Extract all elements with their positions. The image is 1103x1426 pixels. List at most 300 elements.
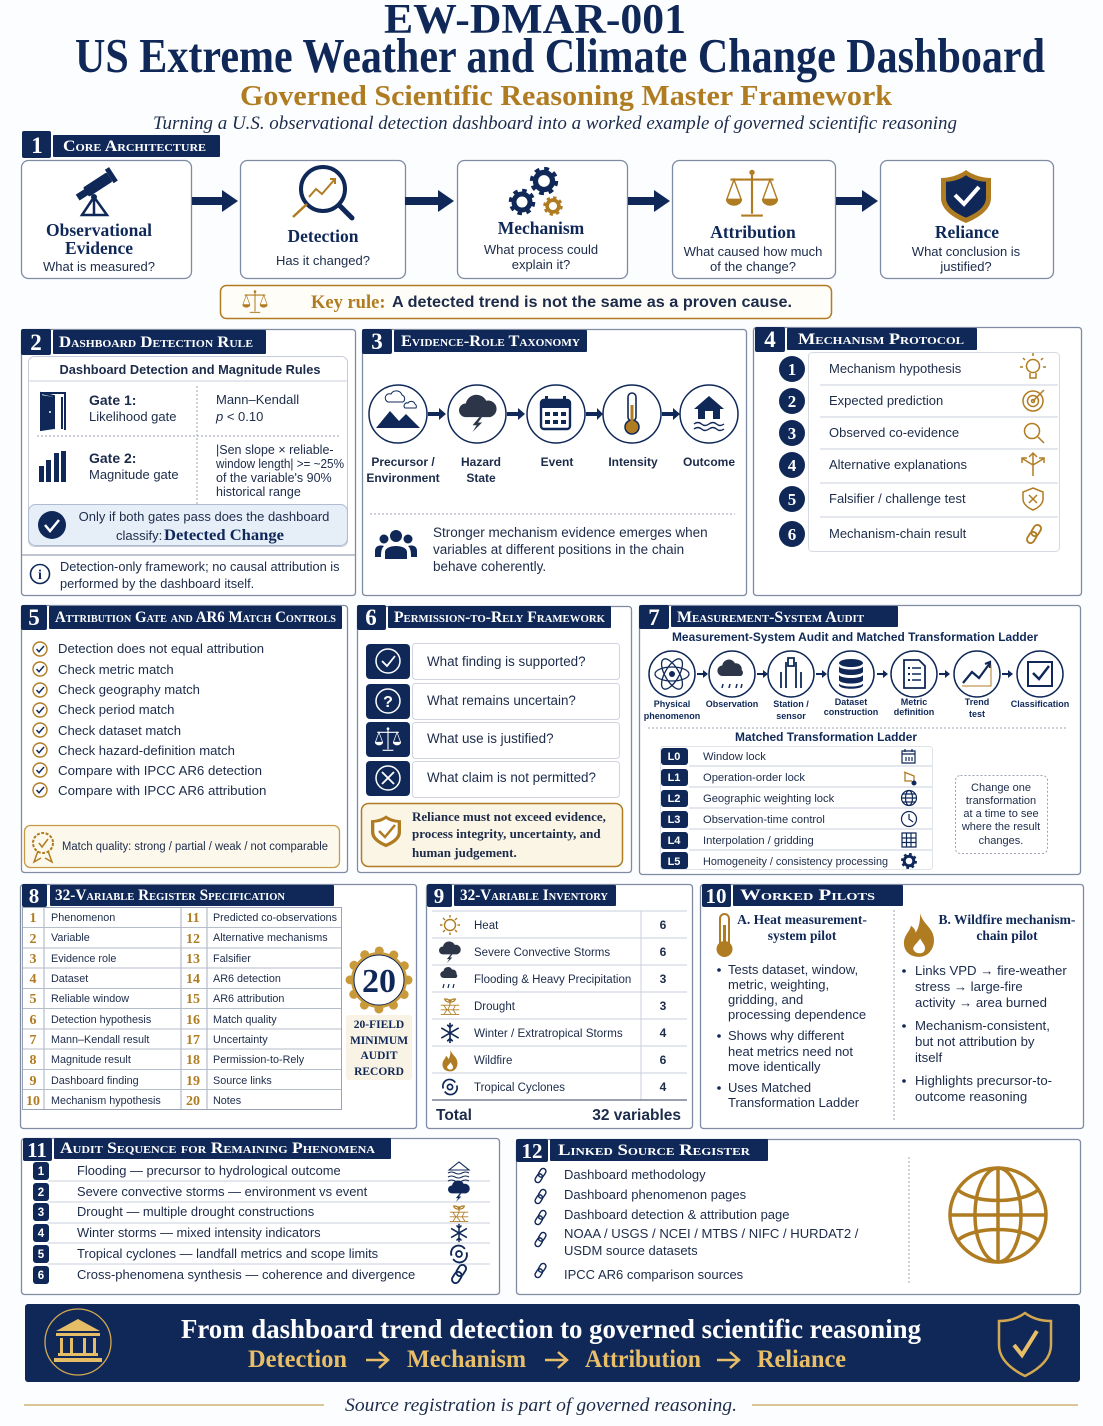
panel 7: measurement-system audit: Matched Transformation Ladder bbox=[735, 730, 917, 744]
section header 7: 7 bbox=[648, 605, 660, 630]
chain: metric definition bbox=[891, 651, 937, 717]
chain: trend test: test bbox=[969, 709, 985, 719]
chain: outcome bbox=[680, 385, 738, 469]
card: observational evidence bbox=[22, 160, 192, 278]
L3: L3 bbox=[668, 814, 680, 826]
register table: Variable bbox=[51, 932, 90, 944]
pilot B: outcome reasoning bbox=[915, 1089, 1027, 1104]
checklist: Check geography match bbox=[58, 682, 200, 697]
step 6 bbox=[779, 521, 1042, 547]
L3 bbox=[661, 811, 916, 828]
winter: Winter / Extratropical Storms bbox=[474, 1027, 623, 1040]
arrow bbox=[836, 190, 878, 212]
card: reliance: justified? bbox=[939, 259, 992, 274]
chain: physical phenomenon: Physical bbox=[654, 699, 690, 709]
section header 4: Mechanism Protocol bbox=[798, 331, 964, 348]
source list: Dashboard detection & attribution page bbox=[564, 1207, 790, 1222]
section header 6 bbox=[357, 605, 611, 630]
section header 9: 32-Variable Inventory bbox=[460, 887, 608, 904]
source list: USDM source datasets bbox=[564, 1243, 698, 1258]
card: attribution: Attribution bbox=[710, 222, 796, 242]
register table: 11 bbox=[186, 911, 200, 926]
callout: both gates bbox=[28, 504, 348, 546]
panel 5: attribution gate bbox=[21, 605, 348, 872]
chain: classification bbox=[1011, 651, 1069, 709]
heat: 6 bbox=[660, 918, 667, 932]
step 6: 6 bbox=[788, 525, 796, 544]
checklist: Check period match bbox=[58, 702, 174, 717]
L3: Observation-time control bbox=[703, 814, 825, 826]
step 1: Flooding — precursor to hydrological outcome bbox=[77, 1163, 341, 1178]
section header 2 bbox=[21, 329, 266, 355]
panel 3: evidence-role taxonomy bbox=[362, 329, 746, 596]
pilot B: but not attribution by bbox=[915, 1034, 1035, 1049]
step 4 bbox=[33, 1224, 467, 1242]
L5: L5 bbox=[668, 856, 680, 868]
register table: Falsifier bbox=[213, 953, 251, 965]
callout: reliance must not exceed: human judgement. bbox=[412, 845, 517, 860]
callout: change one transformation: where the result bbox=[961, 821, 1040, 833]
chain: observation bbox=[706, 651, 758, 709]
section header 1: Core Architecture bbox=[63, 138, 206, 155]
chain: outcome: Outcome bbox=[683, 455, 735, 469]
arrow bbox=[428, 408, 446, 420]
section header 4 bbox=[755, 327, 977, 352]
note: coherence: variables at different positions in the chain bbox=[433, 542, 684, 557]
question: use justified bbox=[366, 722, 620, 758]
wildfire: Wildfire bbox=[474, 1055, 512, 1067]
panel 8: register specification bbox=[20, 884, 416, 1128]
step 3 bbox=[33, 1203, 468, 1221]
chain: hazard state: State bbox=[466, 471, 496, 485]
step 3: 3 bbox=[38, 1207, 44, 1219]
winter bbox=[441, 1023, 667, 1043]
callout: reliance must not exceed bbox=[362, 804, 622, 866]
register table: 20 bbox=[186, 1094, 200, 1109]
total: Total bbox=[436, 1107, 472, 1124]
chain: dataset construction: Dataset bbox=[835, 697, 867, 707]
register table: 10 bbox=[26, 1094, 40, 1109]
gate 2: window length| >= ~25% bbox=[215, 457, 344, 471]
tropical cyclones: 4 bbox=[660, 1080, 667, 1094]
card: reliance: Reliance bbox=[935, 222, 999, 242]
callout: both gates: Only if both gates pass does the dashboard bbox=[79, 509, 329, 524]
register table: 7 bbox=[30, 1033, 36, 1048]
L4 bbox=[661, 832, 916, 849]
severe convective: Severe Convective Storms bbox=[474, 947, 610, 959]
card: mechanism: explain it? bbox=[512, 257, 570, 272]
step 3: Drought — multiple drought constructions bbox=[77, 1204, 314, 1219]
step 2: 2 bbox=[788, 392, 796, 411]
pilot A: system pilot bbox=[768, 928, 837, 943]
checklist: Check hazard-definition match bbox=[58, 743, 235, 758]
gate 1: p < 0.10 bbox=[215, 409, 263, 424]
checklist: Detection does not equal attribution bbox=[58, 641, 264, 656]
step 5: Falsifier / challenge test bbox=[829, 491, 966, 506]
inventory rows bbox=[432, 911, 687, 1100]
panel 2: dashboard detection rule bbox=[21, 329, 356, 596]
register table: Dashboard finding bbox=[51, 1075, 139, 1087]
section header 5 bbox=[21, 605, 342, 630]
chain: precursor bbox=[366, 385, 440, 485]
pilot A: processing dependence bbox=[728, 1007, 866, 1022]
pilot A: Uses Matched bbox=[728, 1080, 811, 1095]
step 1: 1 bbox=[788, 360, 796, 379]
badge caption: MINIMUM bbox=[350, 1035, 408, 1047]
register table: 13 bbox=[186, 952, 200, 967]
pilot B: stress → large-fire bbox=[915, 979, 1023, 994]
register table: Notes bbox=[213, 1095, 242, 1107]
arrow bbox=[662, 408, 680, 420]
pilot A: A. Heat measurement- bbox=[737, 912, 867, 927]
question: supported: What finding is supported? bbox=[427, 654, 586, 669]
card: mechanism bbox=[458, 160, 628, 278]
gate 1 bbox=[41, 392, 299, 430]
section header 3 bbox=[362, 329, 587, 354]
chain: intensity: Intensity bbox=[608, 455, 658, 469]
chain: physical phenomenon: phenomenon bbox=[644, 711, 700, 721]
callout: change one transformation bbox=[956, 776, 1048, 854]
card: detection bbox=[240, 160, 406, 278]
icon: gears bbox=[510, 169, 561, 214]
sequence: Mechanism bbox=[407, 1346, 526, 1373]
arrow bbox=[507, 408, 525, 420]
register table: 8 bbox=[30, 1053, 36, 1068]
note: detection only: i bbox=[38, 568, 42, 583]
severe convective bbox=[439, 941, 667, 963]
register table: AR6 attribution bbox=[213, 993, 284, 1005]
gate 1: Likelihood gate bbox=[89, 409, 176, 424]
source list: NOAA / USGS / NCEI / MTBS / NIFC / HURDAT2 / bbox=[564, 1226, 859, 1241]
pilot B: chain pilot bbox=[976, 928, 1038, 943]
rules table bbox=[28, 356, 348, 546]
severe convective: 6 bbox=[660, 945, 667, 959]
question: uncertain: What remains uncertain? bbox=[427, 693, 576, 708]
gate 1: Mann–Kendall bbox=[216, 392, 299, 407]
section header 12: 12 bbox=[522, 1139, 542, 1163]
question: not permitted: What claim is not permitted? bbox=[427, 770, 596, 785]
step 5 bbox=[33, 1245, 467, 1263]
tropical cyclones bbox=[443, 1079, 667, 1095]
icon: thermometer bbox=[716, 914, 732, 957]
register table: 18 bbox=[186, 1053, 200, 1068]
callout: key rule: A detected trend is not the same as a proven cause. bbox=[392, 294, 792, 311]
heat: Heat bbox=[474, 920, 499, 932]
note: detection only: Detection-only framework; no causal attribution is bbox=[60, 559, 340, 574]
step 2: Expected prediction bbox=[829, 393, 943, 408]
section header 12: Linked Source Register bbox=[558, 1142, 751, 1159]
register table: 19 bbox=[186, 1074, 200, 1089]
source list: Dashboard phenomenon pages bbox=[564, 1187, 747, 1202]
step 2: Severe convective storms — environment vs event bbox=[77, 1184, 368, 1199]
chain: trend test bbox=[954, 651, 1000, 719]
register table: 2 bbox=[30, 932, 36, 947]
question: use justified: What use is justified? bbox=[427, 731, 554, 746]
chain: dataset construction bbox=[824, 651, 878, 717]
register table: 5 bbox=[30, 992, 36, 1007]
pilot A: Transformation Ladder bbox=[728, 1095, 860, 1110]
card: reliance: What conclusion is bbox=[912, 244, 1021, 259]
register table: Phenomenon bbox=[51, 912, 115, 924]
wildfire: 6 bbox=[660, 1053, 667, 1067]
chain: precursor: Environment bbox=[366, 471, 440, 485]
step 5: Tropical cyclones — landfall metrics and scope limits bbox=[77, 1246, 378, 1261]
pilot A bbox=[716, 912, 867, 1110]
tagline: Turning a U.S. observational detection dashboard into a worked example of governed scientific reasoning bbox=[153, 114, 957, 134]
section header 5: 5 bbox=[28, 605, 40, 630]
tropical cyclones: Tropical Cyclones bbox=[474, 1082, 565, 1094]
card: attribution: of the change? bbox=[710, 259, 796, 274]
section header 9 bbox=[427, 884, 616, 908]
source list bbox=[534, 1167, 859, 1282]
section header 11: Audit Sequence for Remaining Phenomena bbox=[60, 1140, 375, 1157]
register table: 9 bbox=[30, 1074, 36, 1089]
chain: intensity bbox=[603, 385, 661, 469]
step 6: Cross-phenomena synthesis — coherence and divergence bbox=[77, 1267, 415, 1282]
gate 2 bbox=[39, 443, 344, 499]
pilot B: B. Wildfire mechanism- bbox=[939, 912, 1075, 927]
question: not permitted bbox=[366, 761, 620, 798]
L5 bbox=[661, 852, 916, 869]
register table: Permission-to-Rely bbox=[213, 1054, 305, 1066]
L4: L4 bbox=[668, 835, 681, 847]
section header 3: 3 bbox=[371, 329, 383, 354]
L0: Window lock bbox=[703, 751, 766, 763]
note: detection only bbox=[30, 559, 340, 591]
section header 2: 2 bbox=[30, 330, 42, 355]
L1 bbox=[661, 769, 916, 786]
icon: telescope bbox=[74, 168, 117, 215]
pilot A: Shows why different bbox=[728, 1028, 844, 1043]
step 2: 2 bbox=[38, 1187, 44, 1199]
card: observational evidence: Observational bbox=[46, 220, 152, 240]
register table: Mechanism hypothesis bbox=[51, 1095, 161, 1107]
step 4: Alternative explanations bbox=[829, 457, 968, 472]
arrow bbox=[628, 190, 670, 212]
sequence: Detection bbox=[248, 1346, 347, 1373]
step 1 bbox=[33, 1162, 469, 1182]
L2: Geographic weighting lock bbox=[703, 793, 835, 805]
section header 8: 32-Variable Register Specification bbox=[55, 887, 285, 904]
icon: flame bbox=[904, 913, 934, 957]
L1: Operation-order lock bbox=[703, 772, 805, 784]
chain: precursor: Precursor / bbox=[371, 455, 435, 469]
register table: 3 bbox=[30, 952, 36, 967]
L2: L2 bbox=[668, 793, 680, 805]
question: supported bbox=[366, 644, 620, 680]
step 1: Mechanism hypothesis bbox=[829, 361, 962, 376]
question: uncertain: ? bbox=[383, 694, 393, 711]
step 3: Observed co-evidence bbox=[829, 425, 959, 440]
section header 12 bbox=[516, 1139, 768, 1163]
card: detection: Has it changed? bbox=[276, 253, 370, 268]
winter: 4 bbox=[660, 1026, 667, 1040]
total: 32 variables bbox=[592, 1107, 681, 1124]
wildfire bbox=[442, 1050, 667, 1071]
source list: IPCC AR6 comparison sources bbox=[564, 1267, 744, 1282]
step 4: Winter storms — mixed intensity indicators bbox=[77, 1225, 321, 1240]
pilot B bbox=[902, 912, 1075, 1104]
question: uncertain bbox=[366, 684, 620, 720]
step 6: Mechanism-chain result bbox=[829, 526, 967, 541]
callout: change one transformation: changes. bbox=[979, 835, 1023, 847]
section header 1: 1 bbox=[31, 133, 43, 158]
drought: Drought bbox=[474, 1001, 516, 1013]
arrow bbox=[586, 408, 603, 420]
icon: globe bbox=[950, 1168, 1046, 1262]
register table: 15 bbox=[186, 992, 200, 1007]
panel 11: audit sequence bbox=[22, 1138, 500, 1294]
icon: scales bbox=[726, 170, 778, 216]
subtitle: Governed Scientific Reasoning Master Framework bbox=[240, 80, 893, 112]
gate 2: |Sen slope × reliable- bbox=[216, 443, 334, 457]
callout: match quality bbox=[24, 826, 340, 868]
register table: 4 bbox=[30, 972, 36, 987]
step 6: 6 bbox=[38, 1270, 44, 1282]
callout: change one transformation: at a time to see bbox=[963, 808, 1039, 820]
step 2 bbox=[779, 388, 1044, 414]
section header 5: Attribution Gate and AR6 Match Controls bbox=[55, 609, 336, 626]
pilot B: Highlights precursor-to- bbox=[915, 1073, 1052, 1088]
chain: station / sensor: Station / bbox=[773, 699, 809, 709]
panel 6: permission-to-rely bbox=[357, 605, 632, 872]
card: attribution bbox=[672, 160, 836, 278]
chain: observation: Observation bbox=[706, 699, 758, 709]
step 5 bbox=[779, 486, 1043, 512]
note: detection only: performed by the dashboard itself. bbox=[60, 576, 254, 591]
register table: Predicted co-observations bbox=[213, 912, 337, 924]
note: coherence bbox=[375, 525, 708, 574]
callout: reliance must not exceed: Reliance must not exceed evidence, bbox=[412, 809, 606, 824]
pilot A: heat metrics need not bbox=[728, 1044, 853, 1059]
section header 6: 6 bbox=[365, 605, 377, 630]
step 5: 5 bbox=[788, 490, 796, 509]
register table: 6 bbox=[30, 1013, 36, 1028]
chain: classification: Classification bbox=[1011, 699, 1069, 709]
checklist: Compare with IPCC AR6 detection bbox=[58, 763, 262, 778]
panel 7: measurement-system audit: Measurement-System Audit and Matched Transformation Ladder bbox=[672, 630, 1038, 644]
gate 2: Magnitude gate bbox=[89, 467, 179, 482]
flooding bbox=[440, 967, 667, 988]
arrow bbox=[192, 190, 238, 212]
chain: station / sensor bbox=[768, 651, 814, 721]
card: detection: Detection bbox=[288, 226, 359, 246]
panel 1: core architecture bbox=[22, 131, 1054, 318]
L0: L0 bbox=[668, 751, 680, 763]
section header 6: Permission-to-Rely Framework bbox=[394, 609, 605, 626]
register table: 17 bbox=[186, 1033, 200, 1048]
pilot A: move identically bbox=[728, 1059, 821, 1074]
footer note: Source registration is part of governed reasoning. bbox=[345, 1395, 737, 1416]
register table: 16 bbox=[186, 1013, 200, 1028]
section header 7: Measurement-System Audit bbox=[677, 609, 865, 626]
register table: Detection hypothesis bbox=[51, 1014, 152, 1026]
note: coherence: Stronger mechanism evidence emerges when bbox=[433, 525, 708, 540]
section header 10 bbox=[702, 884, 903, 908]
panel 10: worked pilots bbox=[700, 884, 1084, 1128]
pilot B: itself bbox=[915, 1050, 942, 1065]
chain: physical phenomenon bbox=[644, 651, 700, 721]
register table: Mann–Kendall result bbox=[51, 1034, 149, 1046]
step 4 bbox=[779, 452, 1044, 478]
card: observational evidence: What is measured? bbox=[43, 259, 155, 274]
sequence: Attribution bbox=[585, 1346, 701, 1373]
L5: Homogeneity / consistency processing bbox=[703, 856, 888, 868]
drought: 3 bbox=[660, 999, 667, 1013]
register table: Match quality bbox=[213, 1014, 277, 1026]
section header 11: 11 bbox=[27, 1138, 47, 1162]
section header 2: Dashboard Detection Rule bbox=[59, 334, 253, 351]
section header 10: 10 bbox=[706, 884, 726, 908]
section header 4: 4 bbox=[764, 327, 776, 352]
register table: Evidence role bbox=[51, 953, 116, 965]
step 3: 3 bbox=[788, 424, 796, 443]
gate 2: historical range bbox=[216, 485, 301, 499]
register table: Uncertainty bbox=[213, 1034, 268, 1046]
banner: closing statement bbox=[25, 1304, 1080, 1382]
register table: Reliable window bbox=[51, 993, 129, 1005]
chain: metric definition: definition bbox=[894, 707, 934, 717]
gate 2: Gate 2: bbox=[89, 450, 136, 466]
card: mechanism: Mechanism bbox=[498, 218, 585, 238]
flooding: Flooding & Heavy Precipitation bbox=[474, 974, 631, 986]
panel 9: variable inventory bbox=[426, 884, 692, 1128]
badge caption: AUDIT bbox=[360, 1050, 398, 1062]
section header 10: Worked Pilots bbox=[740, 887, 875, 904]
callout: change one transformation: Change one bbox=[971, 782, 1031, 794]
panel 4: mechanism protocol bbox=[754, 327, 1082, 596]
icon: institution bbox=[45, 1309, 111, 1375]
register table: 12 bbox=[186, 932, 200, 947]
section header 1 bbox=[22, 131, 220, 158]
checklist: Check dataset match bbox=[58, 723, 181, 738]
pilot B: Mechanism-consistent, bbox=[915, 1018, 1050, 1033]
register table: 1 bbox=[30, 911, 36, 926]
callout: both gates: Detected Change bbox=[164, 527, 284, 544]
badge caption: 20-FIELD bbox=[354, 1019, 404, 1031]
step 4: 4 bbox=[788, 456, 797, 475]
icon: shield check bbox=[941, 170, 991, 223]
gate 2: of the variable's 90% bbox=[216, 471, 332, 485]
register table: Dataset bbox=[51, 973, 88, 985]
statement: From dashboard trend detection to governed scientific reasoning bbox=[181, 1314, 921, 1344]
register table bbox=[22, 908, 342, 1110]
panel 7: measurement-system audit bbox=[639, 605, 1080, 874]
register table: Source links bbox=[213, 1075, 272, 1087]
section header 7 bbox=[639, 605, 898, 630]
checklist bbox=[33, 641, 266, 798]
chain: hazard state bbox=[448, 385, 506, 485]
icon: magnifier with trend bbox=[293, 167, 352, 218]
register table: Magnitude result bbox=[51, 1054, 131, 1066]
flooding: 3 bbox=[660, 972, 667, 986]
section header 8: 8 bbox=[29, 884, 39, 908]
callout: both gates: classify: bbox=[116, 528, 162, 543]
step 4: 4 bbox=[38, 1228, 45, 1240]
callout: reliance must not exceed: process integrity, uncertainty, and bbox=[412, 826, 601, 841]
panel 12: linked source register bbox=[516, 1139, 1080, 1294]
card: observational evidence: Evidence bbox=[65, 238, 133, 258]
L1: L1 bbox=[668, 772, 680, 784]
note: coherence: behave coherently. bbox=[433, 559, 546, 574]
heat bbox=[440, 915, 667, 935]
chain: dataset construction: construction bbox=[824, 707, 878, 717]
chain: trend test: Trend bbox=[965, 697, 989, 707]
register table: 14 bbox=[186, 972, 200, 987]
step 3 bbox=[779, 420, 1044, 446]
card: attribution: What caused how much bbox=[684, 244, 822, 259]
pilot B: activity → area burned bbox=[915, 995, 1047, 1010]
